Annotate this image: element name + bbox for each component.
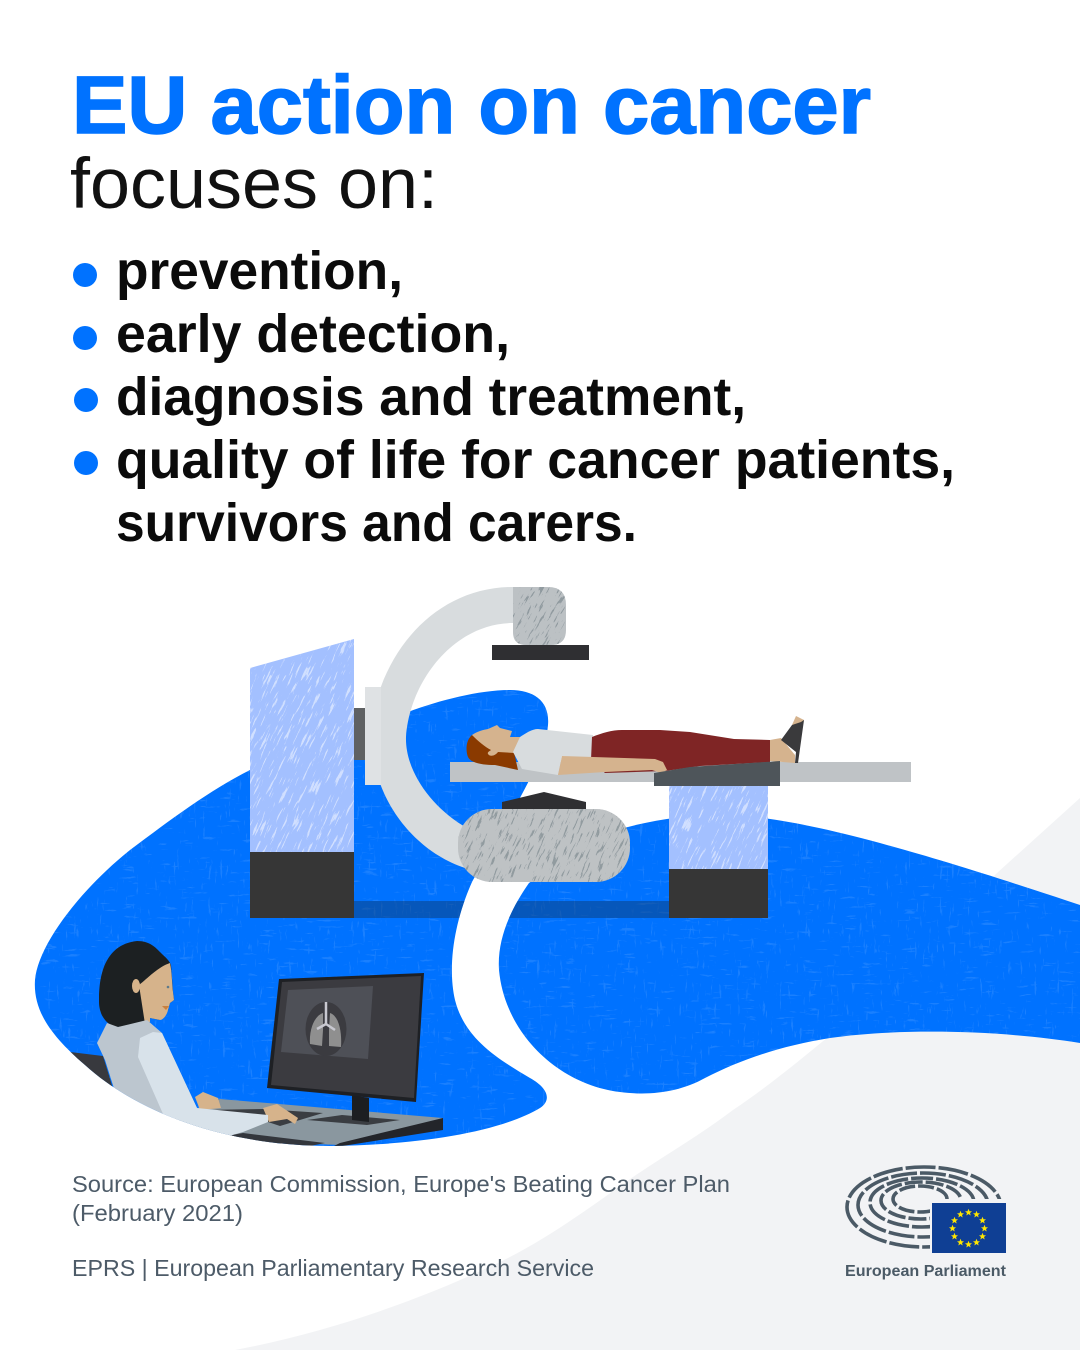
doctor sleeve xyxy=(138,1032,268,1140)
bullet: quality of life: quality of life for cancer patients, xyxy=(116,430,955,490)
bullet: diagnosis and treatment: diagnosis and treatment, xyxy=(116,367,746,427)
desk xyxy=(170,1099,443,1148)
source text: EPRS | European Parliamentary Research Service xyxy=(72,1255,594,1281)
scanner column xyxy=(250,639,365,918)
source text xyxy=(72,1171,730,1281)
source text: Source: European Commission, Europe's Beating Cancer Plan xyxy=(72,1171,730,1197)
table xyxy=(450,762,911,782)
table cushion xyxy=(654,761,780,786)
doctor hands xyxy=(195,1092,298,1124)
bullet: quality of life xyxy=(74,430,955,553)
background: pale grey curved shape xyxy=(235,798,1080,1350)
doctor at workstation xyxy=(62,941,443,1148)
chair xyxy=(70,1052,112,1086)
icon: lungs x-ray xyxy=(310,1002,341,1047)
bullet: prevention: prevention, xyxy=(116,241,403,301)
title: EU action on cancer xyxy=(72,60,871,151)
doctor body xyxy=(97,1020,197,1125)
monitor xyxy=(267,973,424,1122)
patient lying on table xyxy=(467,716,804,775)
icon: hemicycle xyxy=(847,1167,1012,1259)
blue shape: left blob xyxy=(30,685,555,1150)
table pedestal xyxy=(669,786,768,918)
C-arm xyxy=(365,587,513,868)
bullet list xyxy=(73,241,955,553)
bullet: quality of life: survivors and carers. xyxy=(116,493,637,553)
bullet: early detection: early detection, xyxy=(116,304,510,364)
logo: European Parliament xyxy=(845,1167,1012,1280)
scanner head: bottom xyxy=(458,792,630,882)
doctor head xyxy=(99,941,174,1027)
floor shadow under the scanner xyxy=(354,901,669,918)
source text: (February 2021) xyxy=(72,1200,243,1226)
logo wordmark: European Parliament xyxy=(845,1263,1006,1280)
scanner head: top xyxy=(492,587,589,660)
blue shape: right blob xyxy=(490,810,1080,1100)
icon: EU flag xyxy=(932,1203,1006,1253)
subtitle: focuses on: xyxy=(70,145,438,224)
